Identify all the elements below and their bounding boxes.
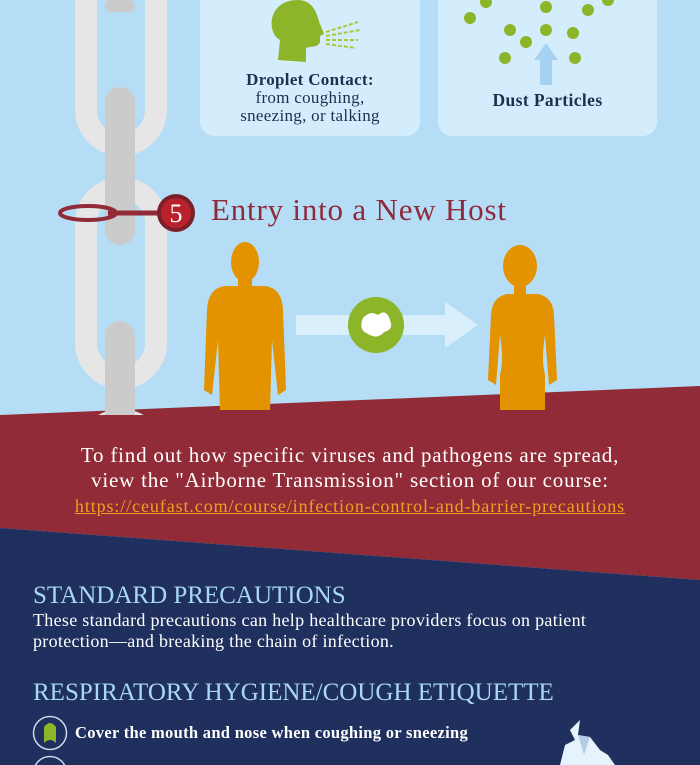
text: course callout: view the "Airborne Transmission" section of our course:: [91, 468, 609, 492]
heading: standard precautions: STANDARD PRECAUTIONS: [33, 582, 346, 609]
text: droplet label: from coughing,: [255, 88, 364, 107]
panel: dust particles: [438, 0, 657, 136]
icon: partial circle next item: [34, 756, 66, 765]
heading: step 5: 5: [170, 199, 182, 228]
text: course callout: https://ceufast.com/course/infection-control-and-barrier-precautions: [75, 496, 625, 516]
icon: tissue: [560, 720, 615, 765]
text: course callout: [74, 443, 626, 516]
text: standard precautions body: These standard precautions can help healthcare providers focus on patient protection—and breaking the chain of infection.: [33, 610, 586, 651]
heading: respiratory hygiene: RESPIRATORY HYGIENE/COUGH ETIQUETTE: [33, 679, 554, 706]
list item: cover mouth: [32, 716, 468, 750]
text: droplet label: Droplet Contact:: [246, 70, 374, 89]
heading: step 5: [58, 192, 507, 232]
chain: [75, 0, 167, 415]
text: dust label: Dust Particles: [492, 90, 603, 110]
text: droplet label: [240, 70, 380, 125]
heading: step 5: Entry into a New Host: [211, 192, 507, 227]
icon: particles: [464, 0, 614, 85]
icon: head sneezing: [272, 0, 360, 62]
icon: transmission between hosts: [204, 242, 557, 410]
panel: droplet contact: [200, 0, 420, 136]
list item: cover mouth: Cover the mouth and nose when coughing or sneezing: [75, 723, 468, 742]
text: droplet label: sneezing, or talking: [240, 106, 380, 125]
text: course callout: To find out how specific viruses and pathogens are spread,: [81, 443, 619, 467]
